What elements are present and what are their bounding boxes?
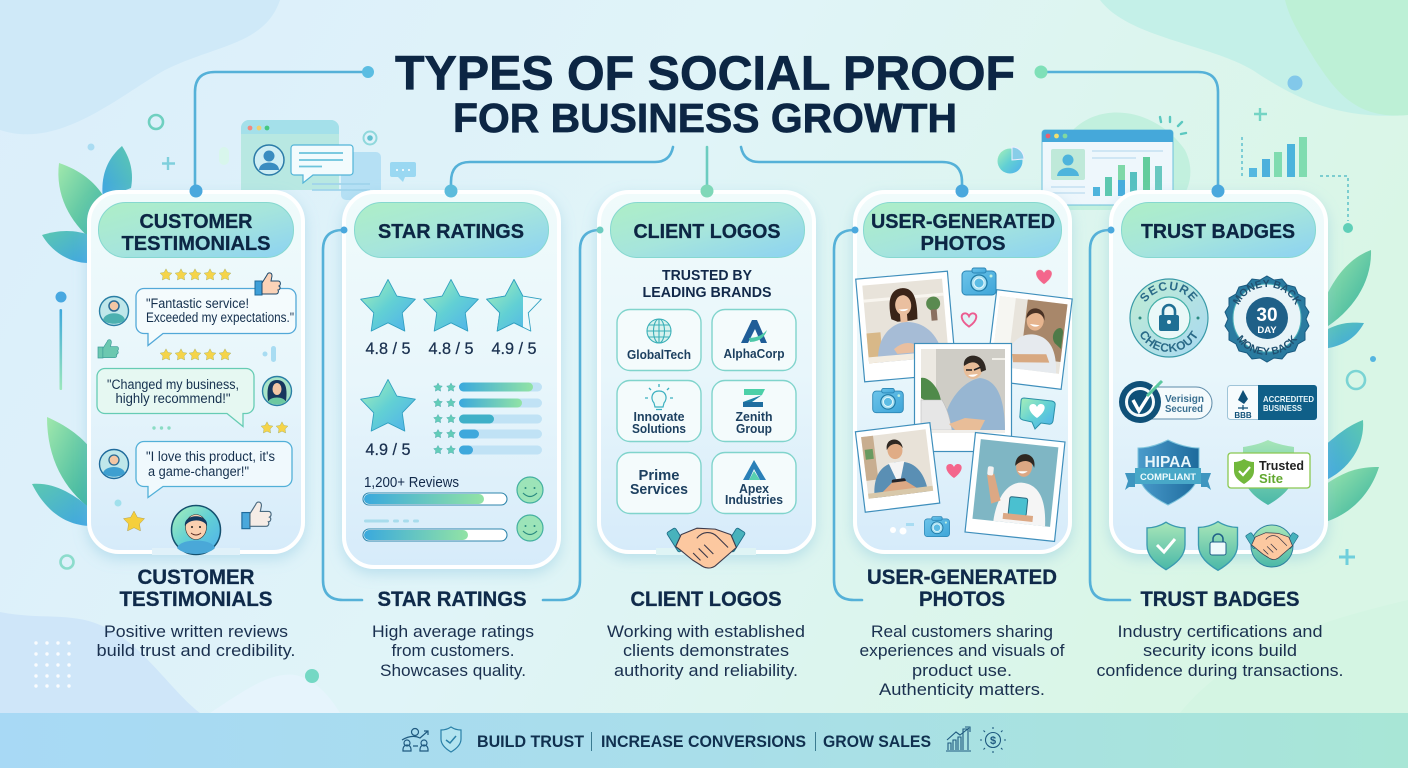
- caption: user-generated photos: PHOTOS: [919, 588, 1005, 611]
- review progress bar 2: [363, 529, 507, 541]
- five stars row: [160, 269, 231, 280]
- icon: shield check: [441, 727, 461, 752]
- icon: gold star: [123, 511, 145, 531]
- rating breakdown bars: [434, 382, 542, 454]
- heading pill: USER-GENERATED: [871, 211, 1055, 233]
- photo: man holding product: [965, 433, 1065, 541]
- large star 4.9: [361, 380, 415, 459]
- logo: GlobalTech: [617, 310, 701, 370]
- quote bubble 3: [136, 442, 292, 498]
- avatar: large customer: [172, 506, 220, 554]
- large star 4.9 partly filled: [487, 280, 541, 358]
- icon: heart ring: [962, 313, 976, 327]
- panel: user-generated photos: [852, 184, 1072, 552]
- caption: client logos: CLIENT LOGOS: [630, 588, 782, 611]
- icon: heart: [946, 464, 962, 478]
- caption: customer testimonials: build trust and credibility.: [96, 642, 296, 660]
- badge: secure checkout: [1129, 278, 1209, 358]
- placeholder dashes: [364, 520, 419, 522]
- icon: camera: [873, 388, 903, 413]
- caption: trust badges: security icons build: [1143, 642, 1297, 660]
- connector dot: [190, 184, 202, 198]
- icon: people network: [402, 728, 428, 751]
- badge: 30 day money back: MONEY BACK: [1236, 334, 1298, 355]
- subheading: [642, 268, 772, 301]
- icon: analytics browser window: [998, 112, 1190, 210]
- caption: user-generated photos: [860, 566, 1065, 699]
- panel: customer testimonials: [89, 184, 303, 555]
- heading pill: [1122, 202, 1316, 258]
- badge: HIPAA compliant: COMPLIANT: [1140, 472, 1196, 483]
- badge: BBB accredited business: BUSINESS: [1263, 404, 1302, 413]
- two stars: [261, 422, 288, 433]
- icon: thumbs up: [255, 273, 280, 295]
- badge: 30 day money back: MONEY BACK: [1232, 280, 1302, 306]
- benefit text: INCREASE CONVERSIONS: [601, 732, 806, 751]
- badge: 30 day money back: 30: [1256, 305, 1278, 326]
- heading pill: STAR RATINGS: [378, 221, 524, 243]
- connector lines: [195, 72, 1218, 600]
- large star 4.9 partly filled: 4.9 / 5: [492, 340, 536, 358]
- icon: heart: [1036, 270, 1052, 284]
- caption: client logos: [607, 588, 805, 680]
- large star 4.8: [361, 280, 415, 358]
- badge: HIPAA compliant: [1125, 440, 1211, 505]
- photo: woman at desk: [856, 271, 956, 382]
- caption: star ratings: Showcases quality.: [380, 662, 526, 680]
- badge: verisign secured: Verisign: [1165, 393, 1204, 405]
- heading pill: TRUST BADGES: [1141, 221, 1295, 243]
- smiley 2: [517, 515, 543, 541]
- badge: trusted site: Trusted: [1259, 458, 1304, 473]
- badge: trusted site: Site: [1259, 471, 1283, 486]
- caption: trust badges: [1096, 588, 1344, 680]
- benefit text: BUILD TRUST: [477, 732, 585, 751]
- badge: shield check: [1147, 522, 1185, 570]
- badge: secure checkout: SECURE: [1140, 282, 1198, 302]
- badge: verisign secured: [1119, 381, 1212, 423]
- large star 4.9: 4.9 / 5: [366, 441, 410, 459]
- decorations: leaves left: [32, 146, 132, 526]
- logo: Zenith Group: [712, 380, 796, 442]
- logo: Prime Services: [617, 452, 701, 514]
- connector dots on title: [362, 66, 1048, 78]
- heading pill: TESTIMONIALS: [122, 233, 270, 255]
- connector dot left: [340, 226, 348, 234]
- footer band: [0, 713, 1408, 768]
- badge: 30 day money back: DAY: [1257, 325, 1277, 336]
- logo: Apex Industries: [712, 452, 796, 514]
- badge: handshake circle: [1245, 525, 1299, 567]
- quote bubble 2: highly recommend!": [116, 391, 231, 406]
- panel: client logos: [596, 184, 814, 568]
- five stars row: [160, 349, 231, 360]
- icon: camera: [924, 517, 950, 537]
- heading pill: CLIENT LOGOS: [634, 221, 780, 243]
- decorations: leaves right: [1322, 250, 1379, 523]
- quote bubble 2: [97, 368, 254, 426]
- logo: Apex Industries: Industries: [725, 493, 783, 507]
- title: [395, 48, 1015, 141]
- logo: Innovate Solutions: [617, 380, 701, 442]
- badge: BBB accredited business: [1228, 385, 1317, 420]
- icon: small thumbs up: [98, 340, 119, 358]
- heading pill: [610, 202, 804, 258]
- logo: AlphaCorp: [712, 310, 796, 370]
- connector dot left: [1108, 226, 1114, 234]
- panel: star ratings: [340, 184, 559, 567]
- faint dots: [262, 346, 276, 362]
- caption: star ratings: [372, 588, 534, 680]
- badge: verisign secured: Secured: [1165, 403, 1203, 415]
- quote bubble 3: a game-changer!": [148, 464, 249, 479]
- connector dot: [700, 184, 714, 198]
- logo: Prime Services: Prime: [638, 467, 680, 484]
- icon: dollar sun: [980, 727, 1006, 753]
- three dots: [152, 426, 171, 430]
- heading pill: [864, 202, 1062, 258]
- badge: trusted site: [1228, 440, 1310, 505]
- icon: growth chart: [946, 727, 971, 751]
- logo: Zenith Group: Zenith: [736, 410, 772, 424]
- caption: trust badges: confidence during transactions.: [1096, 662, 1344, 680]
- review progress bar 1: [363, 493, 507, 505]
- heading pill: [98, 202, 294, 258]
- quote bubble 1: Exceeded my expectations.": [146, 310, 294, 325]
- badge: shield lock: [1198, 522, 1238, 570]
- quote bubble 1: "Fantastic service!: [146, 296, 249, 311]
- icon: large thumbs up: [242, 502, 271, 529]
- logo: Innovate Solutions: Innovate: [634, 410, 685, 424]
- large star 4.8: [424, 280, 478, 358]
- heading pill: CUSTOMER: [140, 211, 253, 233]
- caption: customer testimonials: TESTIMONIALS: [120, 588, 272, 611]
- decorative bar chart top right: [1249, 137, 1307, 177]
- badge: HIPAA compliant: HIPAA: [1144, 454, 1192, 471]
- caption: trust badges: TRUST BADGES: [1140, 588, 1300, 611]
- decorations: small shapes: [34, 76, 1376, 688]
- title: FOR BUSINESS GROWTH: [453, 95, 957, 141]
- caption: client logos: clients demonstrates: [623, 642, 789, 660]
- logo: Innovate Solutions: Solutions: [632, 422, 686, 436]
- badge: 30 day money back: [1224, 275, 1310, 363]
- logo: Prime Services: Services: [630, 481, 688, 498]
- caption: client logos: authority and reliability.: [614, 662, 798, 680]
- heading pill: [354, 202, 548, 258]
- reviews count: 1,200+ Reviews: [364, 475, 459, 491]
- photo: man at laptop: [914, 344, 1012, 452]
- photo: man with arms crossed: [986, 290, 1072, 389]
- caption: user-generated photos: USER-GENERATED: [867, 566, 1057, 589]
- caption: user-generated photos: Real customers sharing: [871, 623, 1053, 641]
- badge: BBB accredited business: BBB: [1234, 411, 1252, 420]
- connector dot: [956, 184, 968, 198]
- smiley 1: [517, 477, 543, 503]
- subheading: TRUSTED BY: [662, 268, 752, 284]
- quote bubble 1: [136, 288, 296, 346]
- caption: star ratings: from customers.: [392, 642, 514, 660]
- subheading: LEADING BRANDS: [642, 285, 772, 301]
- heading pill: PHOTOS: [920, 233, 1006, 255]
- caption: customer testimonials: CUSTOMER: [138, 566, 254, 589]
- caption: user-generated photos: experiences and visuals of: [860, 642, 1065, 660]
- caption: star ratings: High average ratings: [372, 623, 534, 641]
- panel: trust badges: [1104, 184, 1333, 572]
- quote bubble 2: "Changed my business,: [107, 377, 239, 392]
- photo: man holding mug: [855, 423, 940, 512]
- icon: testimonial browser window: [219, 120, 416, 200]
- photo dots: [890, 523, 914, 534]
- faint dot: [114, 500, 122, 506]
- logo: GlobalTech: GlobalTech: [627, 348, 691, 362]
- caption: trust badges: Industry certifications and: [1118, 623, 1322, 641]
- connector dot: [444, 184, 458, 198]
- caption: star ratings: STAR RATINGS: [378, 588, 526, 611]
- avatar: [100, 296, 128, 326]
- caption: user-generated photos: product use.: [912, 662, 1012, 680]
- icon: dollar sun: $: [990, 735, 996, 747]
- connector dot left: [852, 226, 858, 234]
- icon: handshake: [666, 528, 746, 568]
- quote bubble 3: "I love this product, it's: [146, 449, 275, 464]
- caption: user-generated photos: Authenticity matters.: [879, 681, 1045, 699]
- caption: client logos: Working with established: [607, 623, 805, 641]
- logo: Zenith Group: Group: [736, 422, 772, 436]
- icon: camera: [962, 268, 996, 295]
- badge: BBB accredited business: ACCREDITED: [1263, 395, 1314, 404]
- avatar: [262, 376, 292, 406]
- icon: heart chat bubble: [1020, 398, 1055, 429]
- benefit text: [477, 732, 931, 751]
- logo: Apex Industries: Apex: [739, 482, 769, 496]
- large star 4.8: 4.8 / 5: [366, 340, 410, 358]
- avatar: [100, 450, 128, 478]
- benefit text: GROW SALES: [823, 732, 931, 751]
- large star 4.8: 4.8 / 5: [428, 340, 474, 358]
- connector dot: [1212, 184, 1224, 198]
- caption: customer testimonials: [96, 566, 296, 660]
- caption: customer testimonials: Positive written reviews: [104, 623, 288, 641]
- title: TYPES OF SOCIAL PROOF: [395, 48, 1015, 100]
- badge: secure checkout: CHECKOUT: [1140, 330, 1197, 352]
- connector dot left: [596, 226, 604, 234]
- logo: AlphaCorp: AlphaCorp: [724, 347, 785, 361]
